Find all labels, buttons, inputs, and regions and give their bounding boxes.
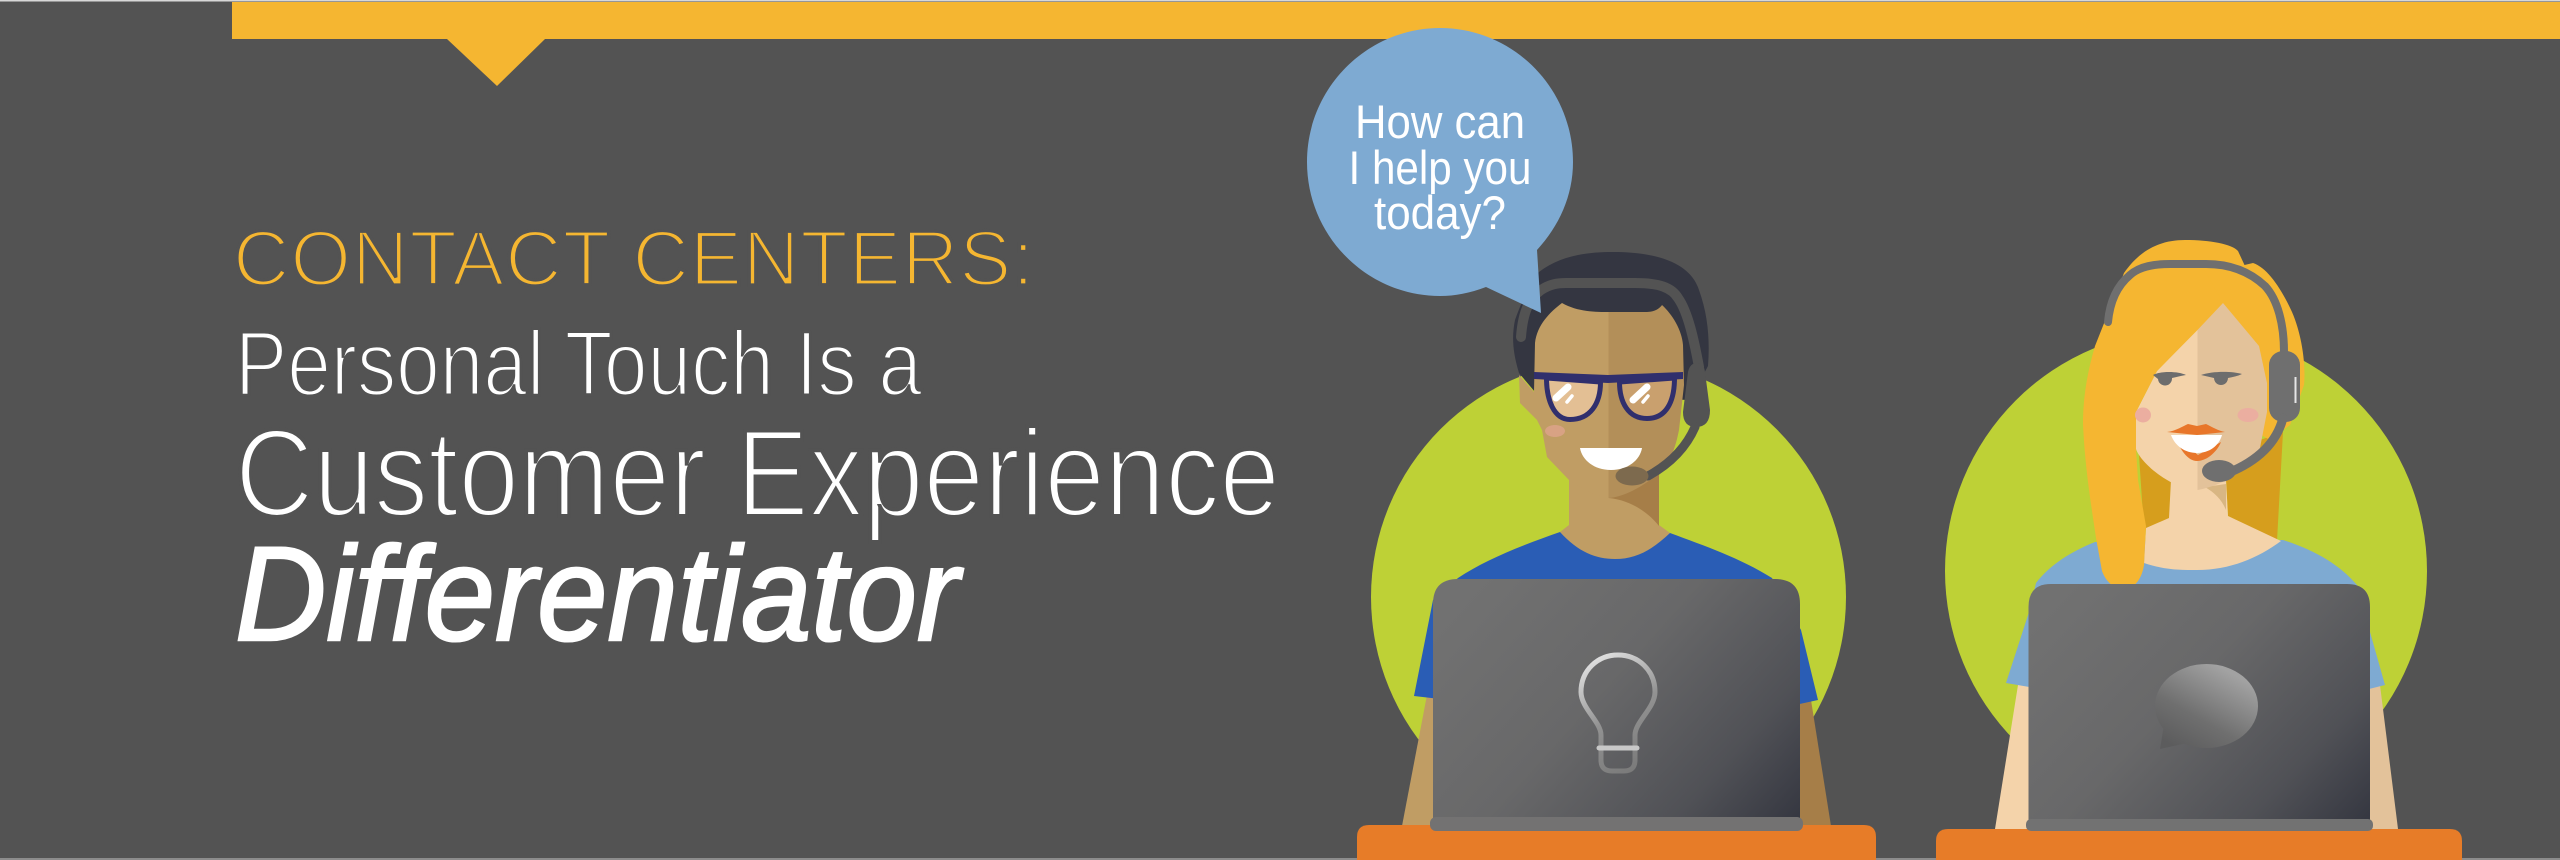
blush <box>2135 408 2258 422</box>
blue shirt <box>1414 532 1818 705</box>
front hair <box>2083 262 2223 589</box>
table <box>1936 829 2462 860</box>
title line: differentiator: Differentiator <box>235 520 964 669</box>
bubble text: today? <box>1374 186 1506 239</box>
neck <box>1560 470 1670 559</box>
neck and chest <box>2144 480 2281 570</box>
head <box>1519 303 1684 498</box>
green circle <box>1371 360 1846 834</box>
smile and lips <box>2167 424 2225 461</box>
green circle <box>1945 330 2427 812</box>
bubble text: I help you <box>1348 141 1532 194</box>
glasses <box>1534 372 1683 420</box>
title line: personal touch: Personal Touch Is a <box>235 313 923 415</box>
eyebrow: contact centers: CONTACT CENTERS: <box>233 214 1034 302</box>
eyes <box>2153 372 2242 386</box>
headband <box>1521 283 1699 367</box>
hair top and back right <box>2120 240 2304 440</box>
table <box>1357 825 1876 860</box>
light blue shirt <box>2006 540 2385 690</box>
top yellow banner with pointer <box>232 2 2560 86</box>
hair back <box>1513 252 1709 400</box>
headset earpiece and boom <box>1616 363 1710 486</box>
blush <box>1545 425 1565 437</box>
speech bubble <box>1307 28 1573 313</box>
illustration: male agent <box>1357 252 1876 860</box>
icon: chat bubble <box>2155 664 2258 749</box>
bubble text <box>1348 95 1532 239</box>
headset <box>2108 264 2300 482</box>
lens highlights <box>1556 387 1648 402</box>
heading text <box>233 214 1280 669</box>
arms <box>1402 695 1831 826</box>
hair back <box>2138 432 2283 541</box>
laptop <box>2026 584 2373 831</box>
face <box>2136 303 2267 490</box>
title line: customer experience: Customer Experience <box>235 405 1280 543</box>
illustration: female agent <box>1936 240 2462 860</box>
icon: light bulb <box>1581 655 1655 771</box>
bubble text: How can <box>1355 95 1525 148</box>
arms <box>1995 685 2398 829</box>
smile <box>1580 448 1642 470</box>
laptop <box>1430 579 1803 831</box>
